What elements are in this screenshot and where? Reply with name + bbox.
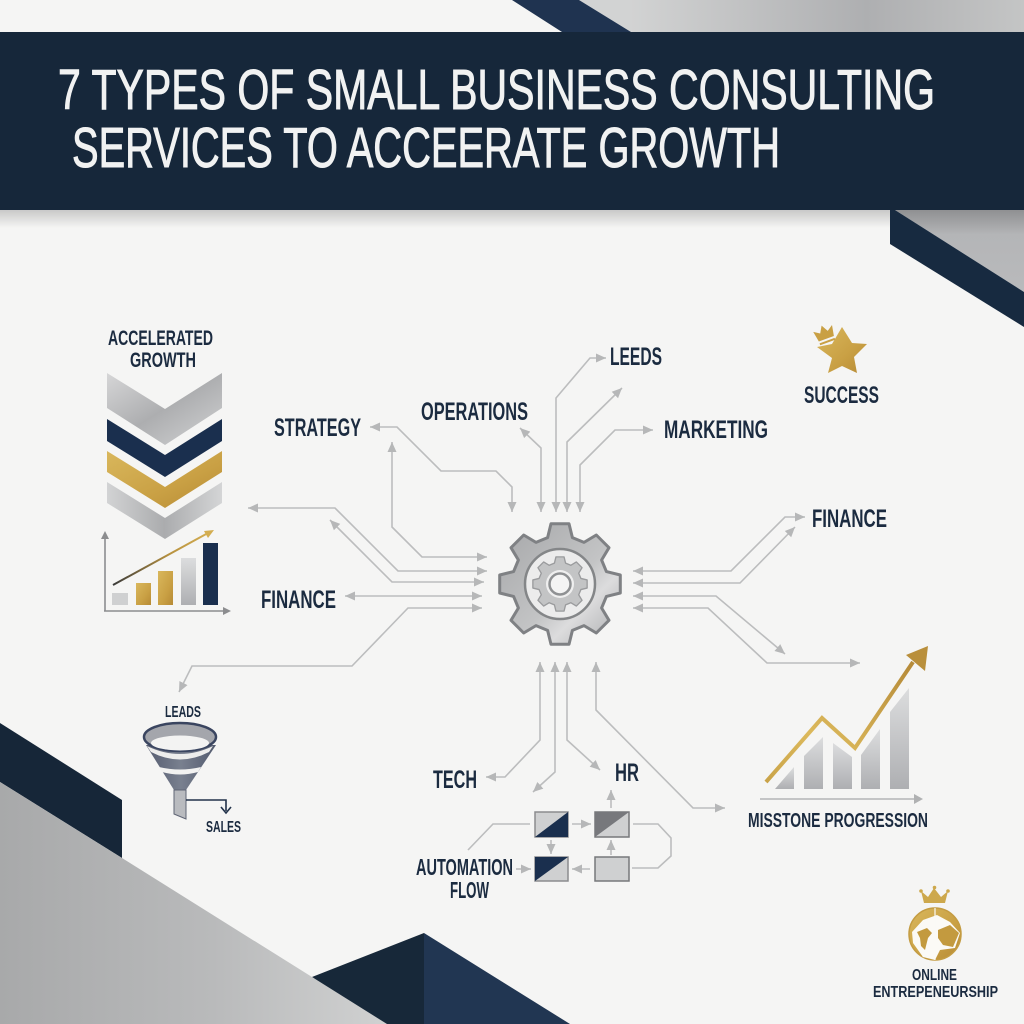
banner shadow	[0, 210, 890, 228]
connector lines	[179, 358, 860, 808]
logo text	[873, 967, 998, 1001]
icon: small crown	[812, 322, 837, 346]
small bar chart	[101, 530, 231, 615]
bottom corner decoration	[0, 723, 570, 1024]
flow box 2	[595, 812, 629, 837]
flow box 4	[595, 857, 629, 881]
label: finance right: FINANCE	[812, 505, 887, 533]
label: strategy: STRATEGY	[274, 414, 361, 442]
label: sales: SALES	[206, 819, 241, 836]
label: tech: TECH	[433, 766, 477, 794]
logo text: ONLINE	[912, 967, 957, 984]
online entrepreneurship logo	[873, 886, 998, 1001]
chart label: MISSTONE PROGRESSION	[748, 810, 928, 832]
central gear icon	[500, 524, 620, 644]
accelerated growth panel	[101, 327, 231, 615]
label: automation flow: FLOW	[450, 877, 489, 903]
gold trend arrow	[766, 646, 928, 782]
top corner decoration	[512, 0, 1024, 32]
flow arrows	[468, 790, 671, 869]
label: leads: LEADS	[165, 704, 201, 721]
chevron stack	[107, 373, 222, 539]
title banner	[0, 32, 1024, 210]
accelerated growth label: ACCELERATED	[108, 327, 213, 350]
label: automation flow: AUTOMATION	[416, 854, 513, 880]
success star icon	[812, 322, 867, 373]
label: automation flow	[416, 854, 513, 903]
icon: crown	[919, 886, 950, 903]
label: success: SUCCESS	[804, 382, 879, 409]
accelerated growth label	[108, 327, 213, 372]
accelerated growth label: GROWTH	[130, 349, 196, 372]
label: marketing: MARKETING	[664, 416, 768, 444]
flow box 3	[535, 857, 568, 881]
automation flow diagram	[468, 790, 671, 881]
label: leeds: LEEDS	[610, 343, 662, 371]
milestone progression chart	[748, 646, 928, 832]
icon: globe	[909, 908, 961, 960]
label: hr: HR	[615, 759, 639, 787]
label: finance left: FINANCE	[261, 586, 336, 614]
flow box 1	[535, 812, 568, 837]
label: operations: OPERATIONS	[421, 398, 528, 426]
chart axis	[760, 794, 923, 804]
right corner decoration	[890, 210, 1024, 327]
chart bars	[775, 688, 909, 789]
funnel icon	[144, 723, 231, 819]
